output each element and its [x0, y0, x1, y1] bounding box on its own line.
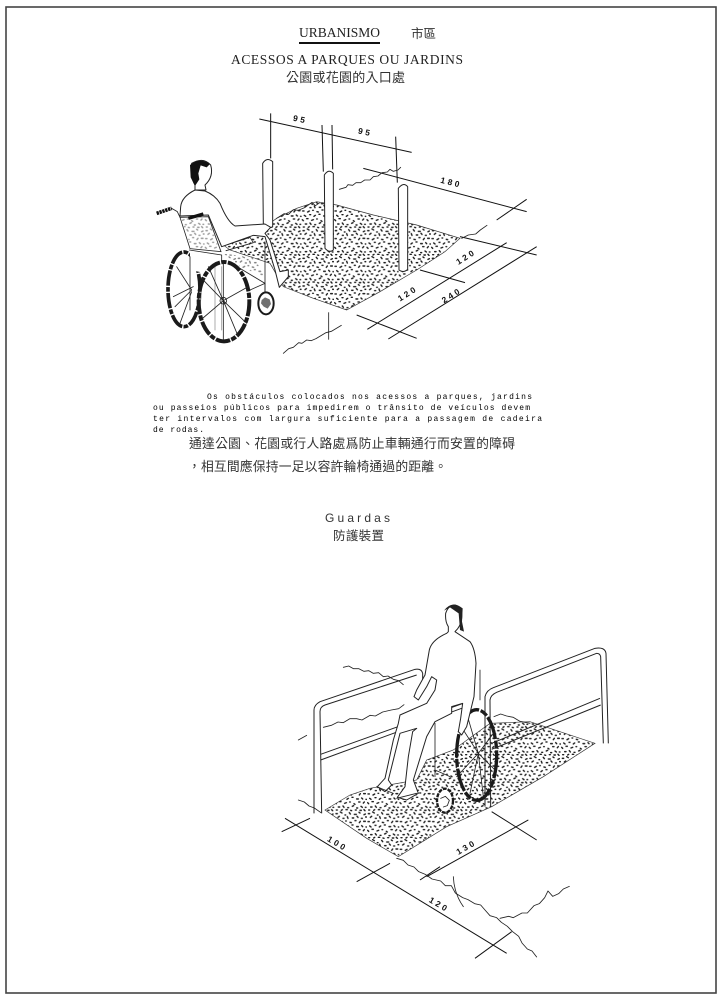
- rough ground lines: [298, 666, 569, 957]
- torso, arm and leg: [180, 190, 288, 287]
- title: Urbanismo: [299, 25, 436, 44]
- paragraph: Portuguese description: de rodas.: [153, 426, 204, 435]
- head: [191, 160, 212, 190]
- heading: Guardas: Guardas: [325, 511, 390, 525]
- paragraph: Portuguese description: ter intervalos com largura suficiente para a passagem de cadeira: [153, 415, 542, 424]
- wheelchair and person: [157, 160, 288, 341]
- body: [377, 605, 476, 800]
- large wheel: [457, 710, 497, 800]
- hair: [444, 605, 464, 632]
- dimension labels: 130: [454, 837, 478, 857]
- dimension labels: 120: [454, 247, 478, 267]
- gravel surface: [223, 202, 460, 310]
- seat and frame: [190, 250, 265, 290]
- title: Urbanismo: URBANISMO: [299, 25, 380, 40]
- dimension labels: 120: [396, 283, 420, 303]
- dimension labels: 120: [427, 895, 451, 914]
- illustration: guard rails with wheelchair user: [282, 605, 608, 958]
- footrests: [377, 770, 450, 798]
- front wheel: [199, 262, 249, 341]
- rough ground lines: [277, 167, 487, 353]
- paragraph: Chinese description: [188, 436, 515, 474]
- bollards: [263, 160, 408, 272]
- title: Urbanismo: 市區: [411, 26, 436, 41]
- stippled chair back: [180, 217, 221, 252]
- heading: access to parks or gardens: 公園或花園的入口處: [286, 70, 405, 85]
- dimension lines: [282, 812, 537, 958]
- gravel surface: [325, 722, 595, 857]
- dimension labels: [292, 113, 478, 305]
- dimension lines: [259, 113, 537, 339]
- paragraph: Portuguese description: ou passeios públicos para impedirem o trânsito de veículos devem: [153, 404, 530, 413]
- wheelchair user: [377, 605, 497, 813]
- rear wheel: [168, 252, 200, 327]
- left guard rail: [314, 669, 463, 813]
- right guard rail: [485, 648, 608, 807]
- heading: Guardas: 防護裝置: [333, 528, 384, 543]
- push handles: [157, 208, 172, 213]
- heading: access to parks or gardens: ACESSOS A PARQUES OU JARDINS: [231, 52, 463, 67]
- dimension labels: 95: [292, 113, 309, 126]
- dimension labels: 180: [440, 175, 463, 190]
- caster wheel: [258, 292, 274, 314]
- dimension labels: [326, 834, 478, 914]
- chair frame: [435, 670, 480, 777]
- illustration: wheelchair user facing bollards: [157, 113, 537, 353]
- dimension labels: 100: [326, 834, 350, 853]
- caster wheel: [437, 789, 453, 813]
- paragraph: Portuguese description: Os obstáculos colocados nos acessos a parques, jardins: [207, 393, 532, 402]
- paragraph: Chinese description: 通達公園、花園或行人路處爲防止車輛通行而安置的障碍: [189, 436, 515, 451]
- dimension labels: 240: [440, 285, 464, 305]
- paragraph: Chinese description: ，相互間應保持一足以容許輪椅通過的距離。: [188, 459, 447, 474]
- paragraph: Portuguese description: [153, 393, 542, 435]
- heading: access to parks or gardens: [231, 52, 463, 85]
- heading: Guardas: [325, 511, 390, 543]
- dimension labels: 95: [357, 126, 374, 138]
